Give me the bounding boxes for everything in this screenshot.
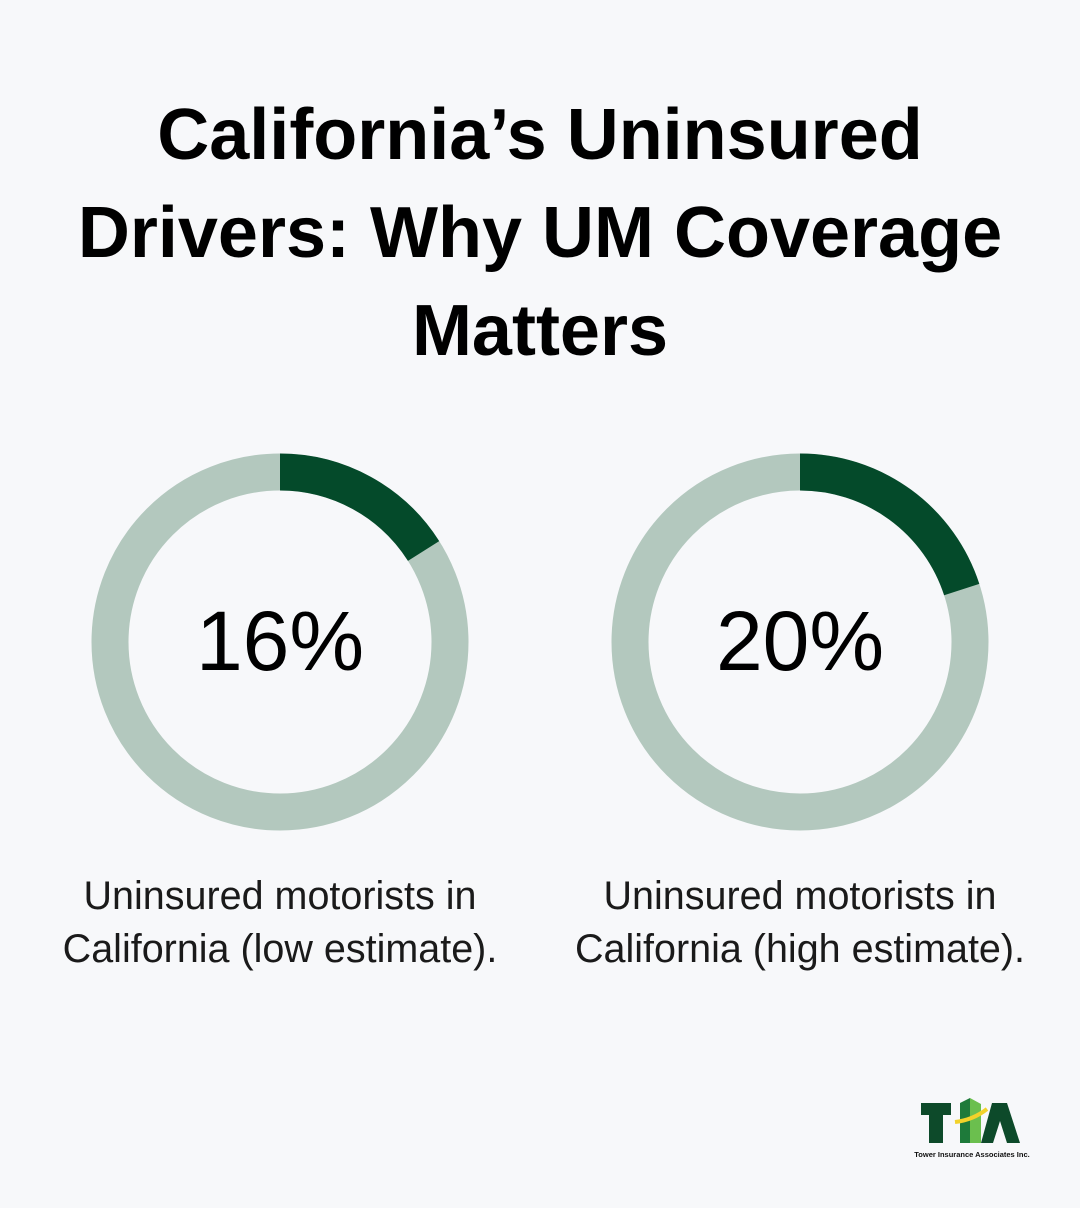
logo: Tower Insurance Associates Inc. [914, 1150, 1030, 1159]
label: high estimate: California (high estimate). [575, 927, 1025, 971]
label: low estimate: Uninsured motorists in [84, 874, 476, 918]
label: high estimate [575, 874, 1025, 971]
label: high estimate: Uninsured motorists in [604, 874, 996, 918]
chart: 16% donut: 16% [196, 594, 364, 688]
chart: 20% donut: 20% [716, 594, 884, 688]
title [78, 95, 1002, 371]
title: California’s Uninsured [157, 95, 923, 175]
chart: 16% donut [92, 454, 468, 830]
title: Drivers: Why UM Coverage [78, 193, 1002, 273]
label: low estimate: California (low estimate). [63, 927, 497, 971]
logo [914, 1098, 1030, 1159]
title: Matters [412, 291, 668, 371]
label: low estimate [63, 874, 497, 971]
chart: 20% donut [612, 454, 988, 830]
